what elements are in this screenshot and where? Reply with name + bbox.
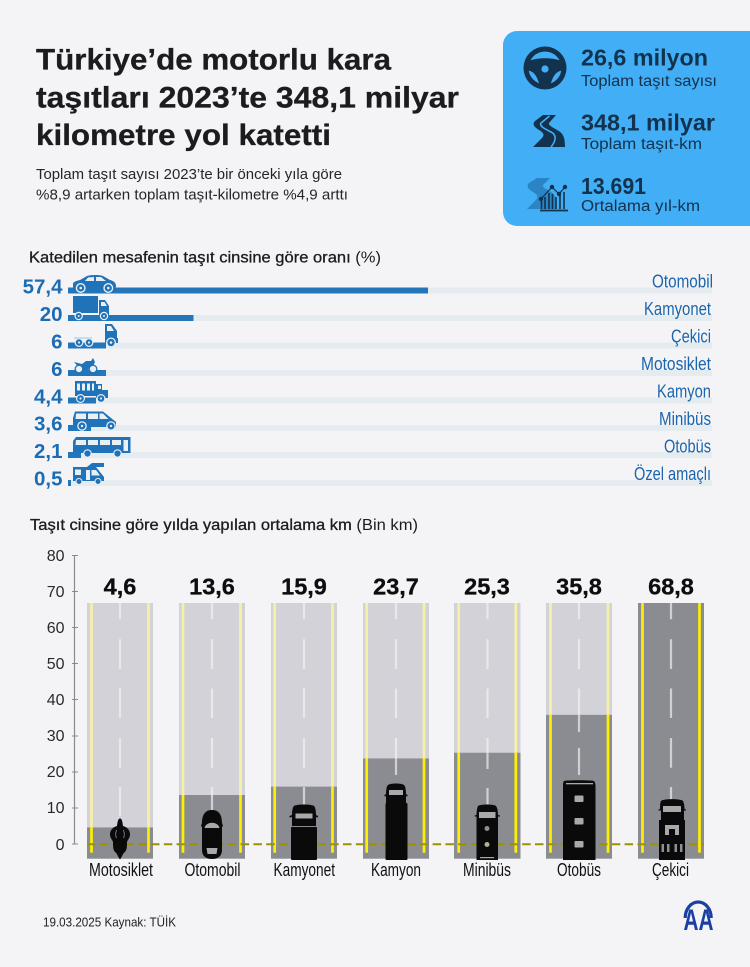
y axis: 80	[47, 548, 65, 565]
subtitle text: %8,9 artarken toplam taşıt-kilometre %4,9 arttı	[36, 188, 348, 204]
value labels: 68,8	[648, 574, 694, 600]
road: Otomobil	[179, 603, 245, 859]
vehicle type labels: Motosiklet	[641, 353, 711, 374]
percent labels: 6	[51, 358, 62, 381]
percent labels: 57,4	[23, 276, 63, 298]
icon: car	[73, 275, 116, 293]
y axis: 0	[56, 837, 65, 854]
icon: special purpose camper	[73, 463, 104, 484]
stat: total vehicles: Toplam taşıt sayısı	[581, 73, 717, 90]
value labels: 4,6	[104, 574, 136, 600]
stat: total vehicles: 26,6 milyon	[581, 44, 708, 70]
category labels: Motosiklet	[89, 860, 153, 880]
vehicle type labels: Özel amaçlı	[634, 463, 711, 484]
vehicle: motorcycle top view	[110, 818, 130, 860]
road: Kamyon	[363, 603, 429, 859]
vehicle: tractor unit top view	[658, 799, 686, 860]
y axis: 30	[47, 728, 65, 745]
stat: total vehicles	[581, 44, 717, 90]
title	[36, 44, 459, 152]
percent labels: 4,4	[34, 386, 63, 408]
category labels: Kamyonet	[274, 860, 335, 880]
icon: winding road	[533, 115, 565, 147]
road bar chart: average yearly km	[47, 548, 704, 880]
vehicle: lorry top view	[384, 784, 408, 860]
percent labels: 6	[51, 330, 62, 354]
vehicle type labels: Kamyon	[657, 380, 711, 402]
stat: total vehicle-km	[581, 110, 715, 153]
category labels	[89, 860, 689, 880]
road: Çekici	[638, 603, 704, 859]
y axis: 70	[47, 584, 65, 601]
percent labels: 0,5	[34, 468, 62, 490]
title: Türkiye’de motorlu kara	[36, 44, 391, 76]
y axis: 10	[47, 800, 65, 817]
vehicle type labels: Otomobil	[652, 270, 713, 292]
icon: minibus	[73, 412, 116, 431]
percent labels: 2,1	[34, 440, 62, 463]
zero dashed line	[87, 843, 704, 845]
icon: lorry	[75, 381, 108, 403]
icon: steering wheel	[524, 46, 566, 90]
bar chart: distance share by vehicle type	[23, 270, 713, 490]
bar values	[68, 288, 428, 486]
stat: total vehicle-km: 348,1 milyar	[581, 110, 715, 136]
percent labels: 3,6	[34, 412, 62, 436]
y axis: 50	[47, 656, 65, 673]
panel: key figures	[503, 31, 750, 226]
value labels: 35,8	[556, 574, 602, 600]
icon: AA logo: AA	[684, 904, 714, 937]
value labels: 23,7	[373, 574, 419, 600]
heading: distance share: Katedilen mesafenin taşıt cinsine göre oranı (%)	[29, 250, 381, 266]
road: Kamyonet	[271, 603, 337, 859]
title: taşıtları 2023’te 348,1 milyar	[36, 82, 459, 114]
value labels	[104, 574, 694, 600]
y axis: 60	[47, 620, 65, 637]
icon: tractor unit	[74, 324, 118, 348]
vehicle type labels: Otobüs	[664, 436, 711, 456]
icon: bus	[73, 437, 130, 457]
icon: motorcycle	[74, 358, 97, 373]
stat: average yearly km: 13.691	[581, 173, 646, 199]
footer: date and source: 19.03.2025 Kaynak: TÜİK	[43, 916, 177, 930]
vehicle type labels: Minibüs	[659, 408, 711, 429]
vehicle: pickup truck top view	[290, 804, 318, 860]
stat: total vehicle-km: Toplam taşıt-km	[581, 136, 702, 153]
vehicle: car top view	[201, 810, 223, 859]
icon: AA logo	[684, 902, 714, 937]
percent labels: 20	[40, 303, 62, 326]
value labels: 13,6	[189, 574, 235, 600]
percent labels	[23, 276, 63, 490]
bar tracks	[68, 288, 712, 486]
value labels: 25,3	[464, 574, 510, 600]
subtitle text: Toplam taşıt sayısı 2023’te bir önceki yıla göre	[36, 167, 342, 183]
y axis	[47, 548, 78, 854]
subtitle text	[36, 167, 348, 204]
y axis: 20	[47, 764, 65, 781]
vehicle: minibus top view	[474, 804, 500, 860]
stat: average yearly km	[581, 173, 700, 215]
vehicle type labels: Çekici	[671, 326, 711, 346]
stat: average yearly km: Ortalama yıl-km	[581, 198, 700, 215]
category labels: Çekici	[652, 860, 689, 880]
road: Otobüs	[546, 603, 612, 859]
heading: yearly average km: Taşıt cinsine göre yılda yapılan ortalama km (Bin km)	[30, 517, 418, 534]
road: Minibüs	[454, 603, 520, 859]
category labels: Minibüs	[463, 860, 511, 880]
category labels: Otomobil	[184, 860, 240, 880]
category labels: Otobüs	[557, 860, 601, 880]
vehicle type labels: Kamyonet	[644, 298, 711, 319]
road: Motosiklet	[87, 603, 153, 859]
icon: road with chart	[527, 178, 568, 210]
icon: van truck	[73, 296, 109, 320]
vehicle type labels	[634, 270, 713, 484]
y axis: 40	[47, 692, 65, 709]
category labels: Kamyon	[371, 860, 421, 880]
title: kilometre yol katetti	[36, 119, 331, 152]
value labels: 15,9	[281, 574, 327, 600]
vehicle: bus top view	[563, 780, 596, 860]
